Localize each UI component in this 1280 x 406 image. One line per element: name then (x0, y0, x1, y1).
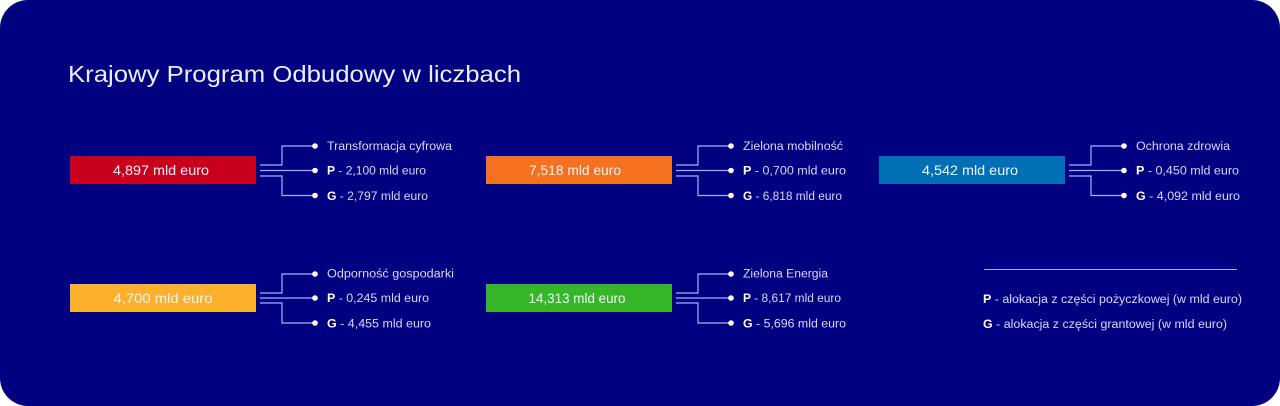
value bar: 4,542 (879, 156, 1065, 184)
value bar: 4,897 (70, 156, 256, 184)
label: P: P - 0,245 mld euro (327, 293, 429, 305)
value bar: 4,700 (70, 284, 256, 312)
label: G: G - 4,092 mld euro (1136, 191, 1240, 203)
value bar: 4,700: 4,700 mld euro (114, 290, 213, 306)
label: G: G - 5,696 mld euro (743, 318, 846, 330)
connector lines (676, 271, 734, 326)
label: P: P - 0,700 mld euro (743, 166, 846, 178)
value bar: 14,313 (486, 284, 672, 312)
value bar: 14,313: 14,313 mld euro (528, 290, 626, 306)
connector lines (676, 143, 734, 198)
label: G: G - 2,797 mld euro (327, 191, 428, 203)
connector lines (260, 271, 318, 326)
connector lines (1069, 143, 1127, 198)
legend: P: P - alokacja z części pożyczkowej (w mld euro) (983, 294, 1242, 306)
connector lines (260, 143, 318, 198)
group: Zielona Energia (486, 268, 846, 330)
label: G: G - 4,455 mld euro (327, 318, 431, 330)
label: category: Zielona mobilność (743, 141, 843, 153)
label: category: Zielona Energia (743, 268, 829, 280)
value bar: 7,518 (486, 156, 672, 184)
value bar: 4,897: 4,897 mld euro (113, 162, 209, 178)
legend: G: G - alokacja z części grantowej (w mld euro) (983, 319, 1227, 331)
legend (983, 270, 1242, 331)
label: category: Ochrona zdrowia (1136, 141, 1231, 153)
group: Odporność gospodarki (70, 268, 454, 330)
label: P: P - 2,100 mld euro (327, 166, 426, 178)
value bar: 4,542: 4,542 mld euro (922, 162, 1018, 178)
label: P: P - 8,617 mld euro (743, 293, 841, 305)
value bar: 7,518: 7,518 mld euro (529, 162, 621, 178)
label: P: P - 0,450 mld euro (1136, 166, 1239, 178)
label: category: Odporność gospodarki (327, 268, 454, 280)
group: Ochrona zdrowia (879, 141, 1240, 203)
title: Krajowy Program Odbudowy w liczbach (68, 61, 521, 87)
group: Transformacja cyfrowa (70, 141, 453, 203)
label: category: Transformacja cyfrowa (327, 141, 453, 153)
group: Zielona mobilność (486, 141, 846, 203)
label: G: G - 6,818 mld euro (743, 191, 842, 203)
